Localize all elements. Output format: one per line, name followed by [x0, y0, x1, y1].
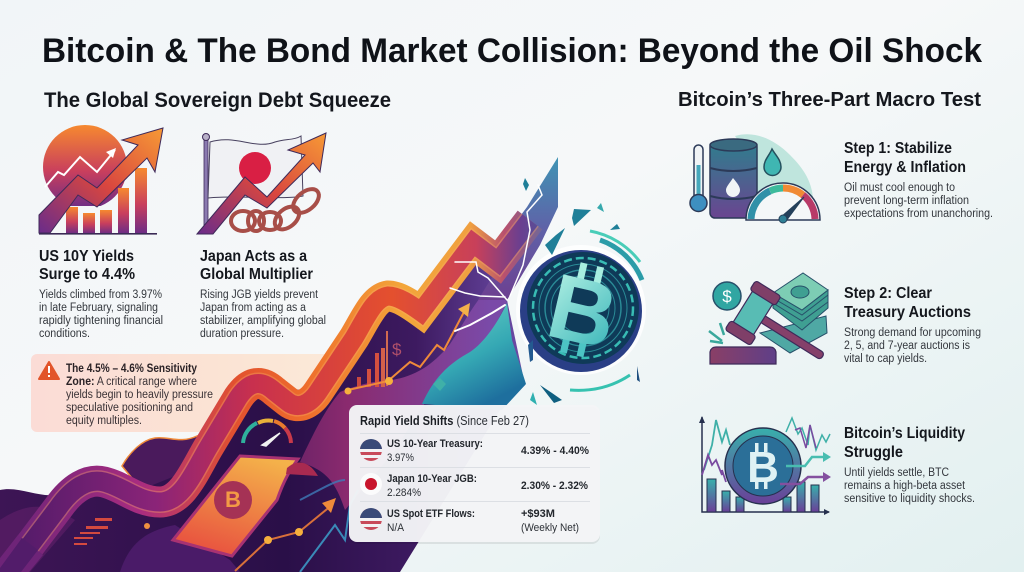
- text: step 1: prevent long-term inflation: [844, 195, 969, 207]
- rising mini chart: $: [392, 340, 402, 359]
- text: step 3: remains a high-beta asset: [844, 480, 966, 492]
- row: us treasury: [360, 439, 589, 461]
- meter gauge on wave: [243, 421, 291, 446]
- gavel: [725, 280, 838, 381]
- text: step 2: Strong demand for upcoming: [844, 327, 981, 339]
- row: japan jgb: 2.30% - 2.32%: [521, 480, 588, 492]
- icon: warning: [39, 362, 59, 379]
- text: step 3: Bitcoin’s Liquidity: [844, 425, 965, 442]
- icon: japan flag with chains: [197, 133, 326, 234]
- banknote with bitcoin: [173, 456, 318, 556]
- panel: rapid yield shifts table: Rapid Yield Shifts (Since Feb 27): [360, 414, 529, 428]
- callout: sensitivity zone: speculative positioning and: [66, 402, 193, 414]
- bitcoin coin: [516, 178, 646, 405]
- text: us yields: Surge to 4.4%: [39, 266, 135, 283]
- small bars lower left: [74, 518, 150, 545]
- text: step 3: Struggle: [844, 444, 903, 461]
- row: us treasury: US 10-Year Treasury:: [387, 438, 483, 450]
- teal wedge: [422, 303, 526, 410]
- icon: bitcoin liquidity chart: [699, 416, 831, 515]
- icon: gavel, cash and coin: $: [722, 287, 732, 306]
- row: us treasury: 4.39% - 4.40%: [521, 445, 589, 457]
- text: japan multiplier: Japan Acts as a: [200, 248, 307, 265]
- row: etf flows: [360, 508, 579, 534]
- dark base: [0, 250, 525, 572]
- text: us yields: [39, 248, 163, 340]
- text: japan multiplier: [200, 248, 326, 340]
- callout: sensitivity zone: Zone: A critical range where: [66, 376, 197, 388]
- text: step 2: 2, 5, and 7-year auctions is: [844, 340, 970, 352]
- icon: us flag: [360, 439, 382, 461]
- text: us yields: conditions.: [39, 328, 90, 340]
- banknote with bitcoin: B: [225, 487, 241, 512]
- text: step 2: [844, 285, 981, 365]
- icon: bitcoin liquidity chart: B: [747, 443, 779, 492]
- wave band: [30, 220, 530, 545]
- row: japan jgb: [360, 473, 588, 499]
- row: etf flows: N/A: [387, 522, 405, 534]
- text: japan multiplier: Global Multiplier: [200, 266, 313, 283]
- row: etf flows: US Spot ETF Flows:: [387, 508, 475, 520]
- text: step 1: Oil must cool enough to: [844, 182, 955, 194]
- lower left blue wave: [300, 490, 358, 572]
- text: step 3: Until yields settle, BTC: [844, 467, 949, 479]
- text: japan multiplier: Rising JGB yields prevent: [200, 289, 319, 301]
- small hill behind wave: [122, 436, 215, 500]
- text: japan multiplier: stabilizer, amplifying global: [200, 315, 326, 327]
- icon: oil barrel, thermometer and gauge: [690, 134, 820, 223]
- text: us yields: in late February, signaling: [39, 302, 158, 314]
- icon: gavel, cash and coin: [709, 273, 838, 381]
- callout: sensitivity zone: equity multiples.: [66, 415, 142, 427]
- row: japan jgb: Japan 10-Year JGB:: [387, 473, 477, 485]
- sounding block: [710, 347, 776, 364]
- rising arrow and nodes: [344, 303, 470, 394]
- wave band tail: [0, 535, 43, 572]
- title: Bitcoin & The Bond Market Collision: Beyond the Oil Shock: [42, 32, 982, 70]
- icon: us flag: [360, 508, 382, 530]
- lower nodes: [235, 498, 336, 571]
- text: us yields: US 10Y Yields: [39, 248, 134, 265]
- text: step 2: Treasury Auctions: [844, 304, 971, 321]
- rising mini chart: [357, 331, 402, 387]
- text: step 1: Energy & Inflation: [844, 159, 966, 176]
- top right shard: [478, 157, 558, 300]
- row: etf flows: (Weekly Net): [521, 522, 579, 534]
- icon: japan flag: [360, 473, 382, 495]
- icon: us yields chart: [39, 125, 163, 235]
- text: step 3: sensitive to liquidity shocks.: [844, 493, 975, 505]
- text: us yields: rapidly tightening financial: [39, 315, 163, 327]
- callout: sensitivity zone: yields begin to heavily pressure: [66, 389, 213, 401]
- text: step 3: [844, 425, 975, 505]
- cash stacks: [760, 273, 828, 353]
- panel: rapid yield shifts table: [349, 405, 600, 544]
- row: us treasury: 3.97%: [387, 452, 414, 464]
- text: step 1: expectations from unanchoring.: [844, 208, 993, 220]
- text: step 1: [844, 140, 993, 220]
- heading: debt squeeze: The Global Sovereign Debt Squeeze: [44, 89, 391, 112]
- text: japan multiplier: duration pressure.: [200, 328, 284, 340]
- text: step 2: Step 2: Clear: [844, 285, 932, 302]
- shards: [523, 178, 640, 405]
- lower purple hills: [300, 285, 507, 510]
- row: japan jgb: 2.284%: [387, 487, 421, 499]
- lightning cracks: [450, 185, 542, 331]
- text: step 1: Step 1: Stabilize: [844, 140, 952, 157]
- callout: sensitivity zone: The 4.5% – 4.6% Sensitivity: [66, 363, 198, 375]
- text: step 2: vital to cap yields.: [844, 353, 927, 365]
- text: japan multiplier: Japan from acting as a: [200, 302, 307, 314]
- heading: macro test: Bitcoin’s Three-Part Macro Test: [678, 89, 981, 111]
- main illustration: rising yield wave: [0, 157, 558, 572]
- bitcoin coin: B: [539, 255, 626, 369]
- text: us yields: Yields climbed from 3.97%: [39, 289, 162, 301]
- callout: sensitivity zone: [31, 354, 331, 432]
- row: etf flows: +$93M: [521, 508, 555, 520]
